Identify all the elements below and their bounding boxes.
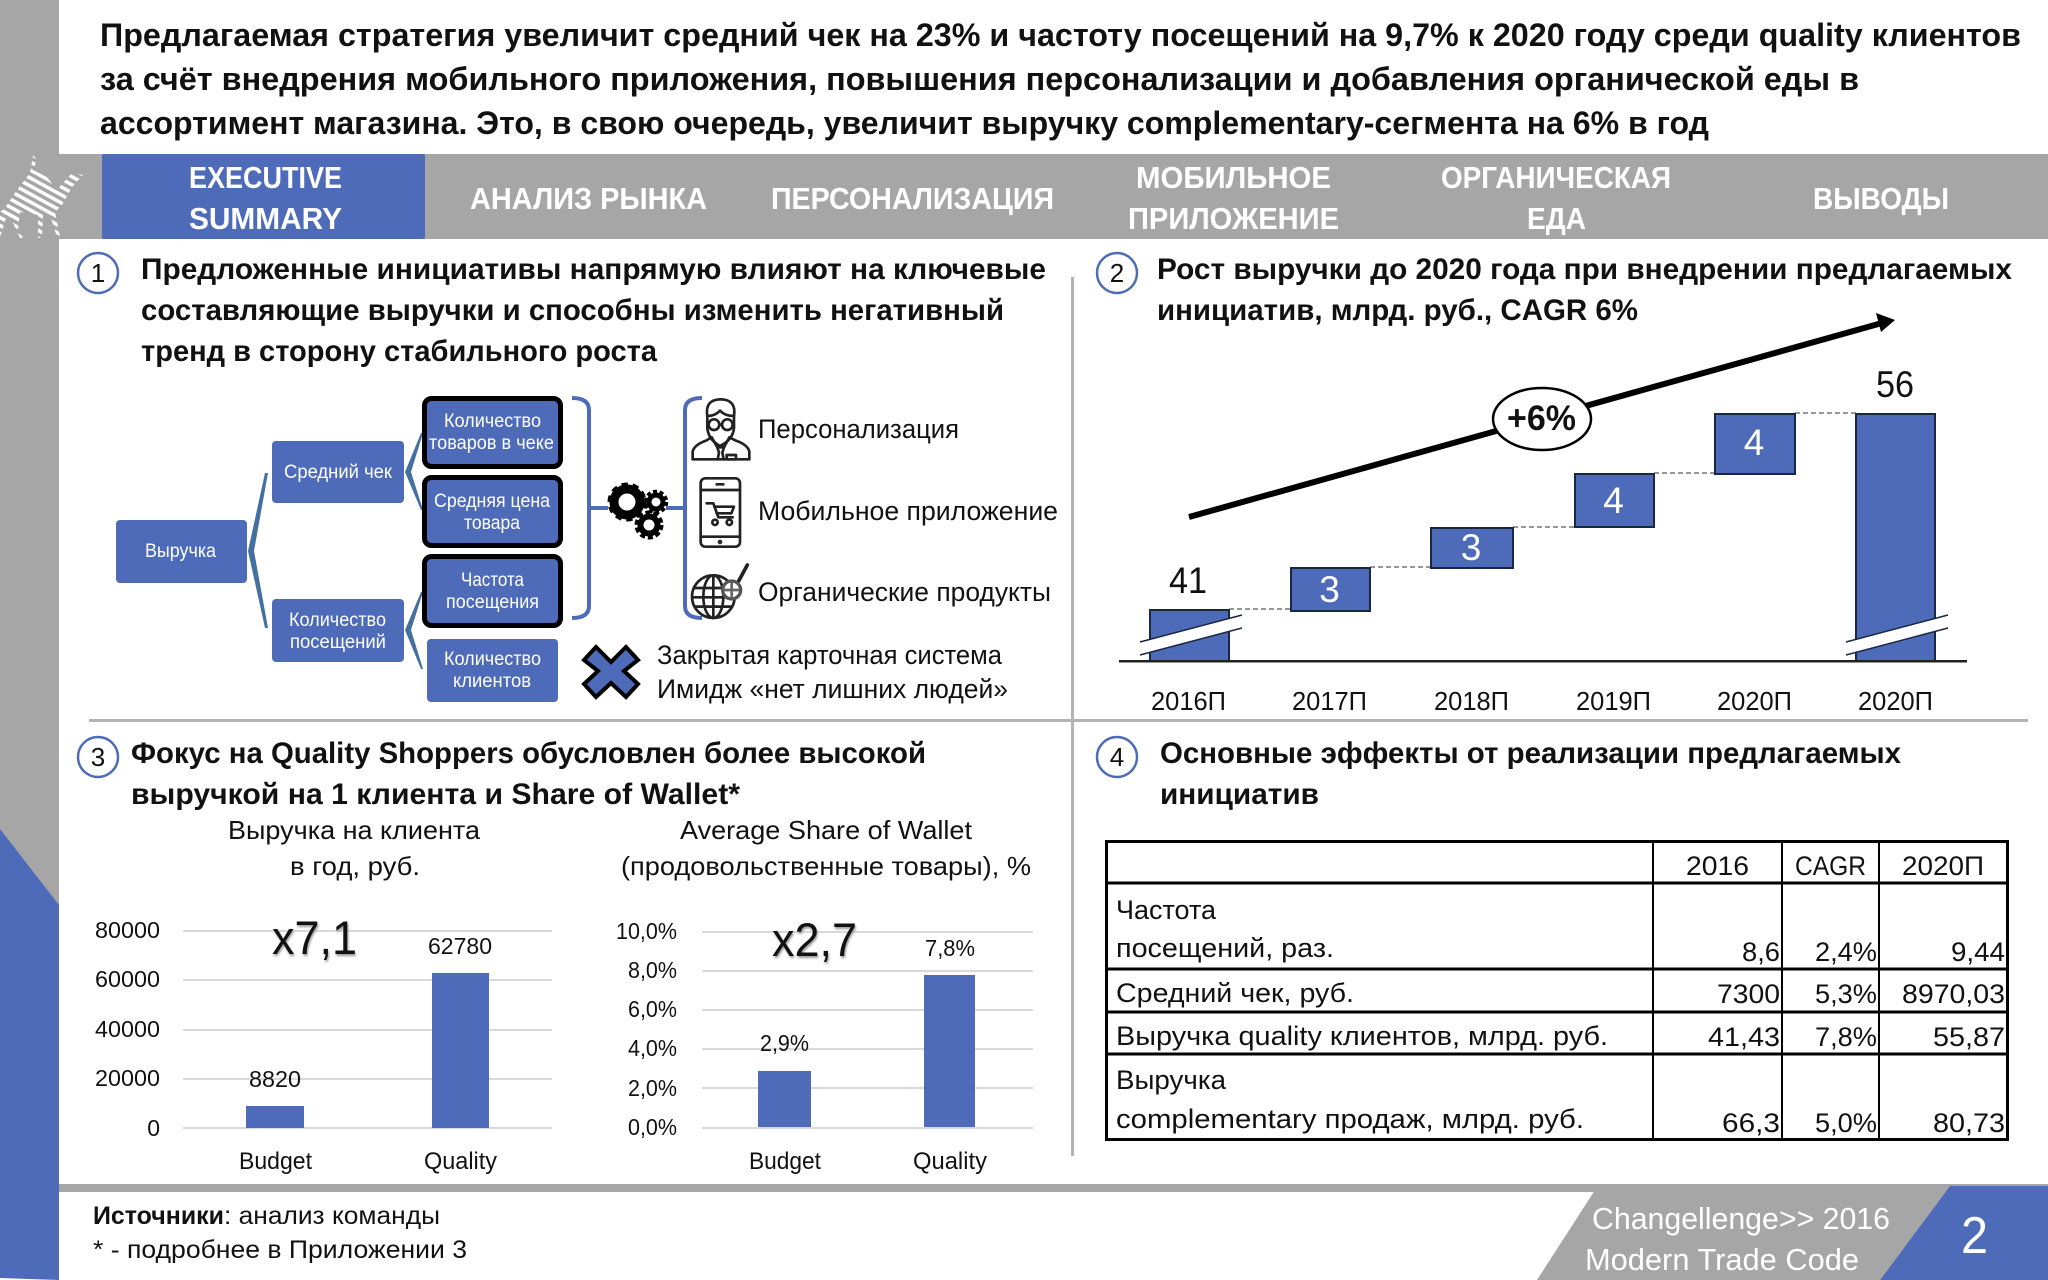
waterfall values: 41 xyxy=(1169,560,1207,601)
box: average item price: Средняя цена xyxy=(434,491,550,512)
navigation bar xyxy=(0,154,2048,239)
right bracket xyxy=(572,398,608,618)
effects table xyxy=(1106,841,2008,1140)
bar chart: share of wallet: 6,0% xyxy=(628,996,677,1022)
box: revenue xyxy=(116,520,247,583)
section number 1 xyxy=(78,253,118,293)
tab: conclusions: ВЫВОДЫ xyxy=(1813,181,1949,216)
waterfall axis xyxy=(1119,660,1967,662)
row: complementary revenue: 80,73 xyxy=(1933,1108,2005,1138)
bar chart: share of wallet: 2,0% xyxy=(628,1075,677,1101)
row: average check: 7300 xyxy=(1717,979,1780,1009)
row: visit frequency: Частота xyxy=(1116,895,1217,925)
tab: organic food: ЕДА xyxy=(1527,201,1586,236)
sources note: * - подробнее в Приложении 3 xyxy=(93,1236,467,1264)
sources note: Источники xyxy=(93,1202,224,1230)
waterfall year labels xyxy=(1151,686,1933,716)
table header: 2020П xyxy=(1902,851,1984,881)
bar chart: share of wallet: 2,9% xyxy=(760,1030,809,1056)
left sidebar xyxy=(0,0,59,1280)
table header xyxy=(1686,851,1984,881)
bar chart: revenue per client: Выручка на клиента xyxy=(228,815,481,845)
panel 1: initiatives and revenue drivers xyxy=(78,253,1058,704)
row: average check: 8970,03 xyxy=(1902,979,2005,1009)
bar chart: revenue per client xyxy=(95,815,552,1175)
waterfall values: 56 xyxy=(1876,364,1914,405)
bar chart: share of wallet: 10,0% xyxy=(616,918,677,944)
label: mobile app: Мобильное приложение xyxy=(758,496,1058,526)
waterfall year labels: 2020П xyxy=(1717,686,1792,716)
dividers xyxy=(89,277,2028,1156)
table header: 2016 xyxy=(1686,851,1749,881)
row: visit frequency: 9,44 xyxy=(1951,937,2005,967)
bar chart: share of wallet: Average Share of Wallet xyxy=(680,815,973,845)
table header: CAGR xyxy=(1795,851,1866,881)
bar chart: revenue per client: 40000 xyxy=(95,1016,160,1042)
panel 1 heading xyxy=(141,253,1046,368)
panel 4 heading xyxy=(1160,737,1901,811)
row: average check: 5,3% xyxy=(1815,979,1877,1009)
bar chart: share of wallet: x2,7 xyxy=(772,913,857,966)
box: visit frequency: посещения xyxy=(446,592,539,613)
growth arrow xyxy=(1189,313,1895,517)
bar chart: revenue per client: 80000 xyxy=(95,917,160,943)
row: complementary revenue: 66,3 xyxy=(1722,1108,1780,1138)
tab: organic food: ОРГАНИЧЕСКАЯ xyxy=(1441,160,1671,195)
bar chart: revenue per client: 0 xyxy=(147,1115,160,1141)
bar chart: share of wallet: Quality xyxy=(913,1148,987,1175)
section number 2: 2 xyxy=(1110,258,1124,288)
row: complementary revenue: complementary продаж, млрд. руб. xyxy=(1116,1104,1584,1134)
box: items per check: Количество xyxy=(444,411,541,432)
row: complementary revenue: Выручка xyxy=(1116,1065,1227,1095)
panel 1 heading: составляющие выручки и способны изменить негативный xyxy=(141,294,1004,327)
section number 1: 1 xyxy=(91,258,105,288)
waterfall year labels: 2017П xyxy=(1292,686,1367,716)
tab: market analysis: АНАЛИЗ РЫНКА xyxy=(470,181,707,216)
growth bubble +6%: +6% xyxy=(1507,399,1576,438)
event badge: Modern Trade Code xyxy=(1585,1242,1859,1277)
panel 2 heading: Рост выручки до 2020 года при внедрении предлагаемых xyxy=(1157,253,2012,286)
waterfall year labels: 2020П xyxy=(1858,686,1933,716)
panel 2: revenue growth waterfall xyxy=(1097,253,2012,716)
waterfall year labels: 2018П xyxy=(1434,686,1509,716)
box: average check xyxy=(272,441,404,503)
icon: phone with cart xyxy=(701,478,740,547)
bar chart: revenue per client: 8820 xyxy=(249,1066,301,1092)
icon: gears xyxy=(610,485,666,538)
icon: globe with magnifier xyxy=(692,565,747,618)
excluded items text: Имидж «нет лишних людей» xyxy=(657,674,1008,704)
row: quality revenue: Выручка quality клиентов, млрд. руб. xyxy=(1116,1021,1608,1051)
bar chart: revenue per client: x7,1 xyxy=(272,911,357,964)
event badge xyxy=(1537,1186,1950,1280)
tab: mobile app: МОБИЛЬНОЕ xyxy=(1136,160,1331,195)
driver tree connectors xyxy=(248,433,423,669)
row: visit frequency: посещений, раз. xyxy=(1116,933,1334,963)
panel 1 heading: Предложенные инициативы напрямую влияют на ключевые xyxy=(141,253,1046,286)
tab: personalization: ПЕРСОНАЛИЗАЦИЯ xyxy=(771,181,1054,216)
box: items per check xyxy=(424,398,560,466)
section number 3 xyxy=(78,737,118,777)
headline: ассортимент магазина. Это, в свою очередь, увеличит выручку complementary-сегмента на 6% в год xyxy=(100,105,1709,141)
box: items per check: товаров в чеке xyxy=(429,433,554,454)
headline: Предлагаемая стратегия увеличит средний чек на 23% и частоту посещений на 9,7% к 2020 году среди quality клиентов xyxy=(100,17,2021,53)
active tab: executive summary xyxy=(102,154,425,239)
sources note: : анализ команды xyxy=(224,1202,440,1230)
row: quality revenue: 55,87 xyxy=(1933,1022,2005,1052)
bar chart: share of wallet: (продовольственные товары), % xyxy=(621,851,1031,881)
tab: mobile app xyxy=(1128,160,1339,236)
panel 3 heading xyxy=(131,737,926,811)
bar chart: revenue per client: 62780 xyxy=(428,933,492,959)
waterfall values: 4 xyxy=(1744,422,1764,463)
panel 2 heading: инициатив, млрд. руб., CAGR 6% xyxy=(1157,294,1638,327)
panel 4 heading: инициатив xyxy=(1160,778,1319,811)
waterfall values xyxy=(1169,364,1914,610)
box: revenue: Выручка xyxy=(145,541,216,562)
section number 2 xyxy=(1097,253,1137,293)
section number 4: 4 xyxy=(1110,742,1124,772)
tab: mobile app: ПРИЛОЖЕНИЕ xyxy=(1128,201,1339,236)
row: average check xyxy=(1116,978,2005,1009)
bar chart: share of wallet: 0,0% xyxy=(628,1114,677,1140)
bar chart: revenue per client: 20000 xyxy=(95,1065,160,1091)
waterfall values: 3 xyxy=(1461,527,1481,568)
bar chart: revenue per client: Quality xyxy=(424,1148,497,1175)
headline xyxy=(100,17,2021,141)
waterfall bars xyxy=(1150,414,1935,661)
bar chart: share of wallet: 8,0% xyxy=(628,957,677,983)
box: average item price: товара xyxy=(464,513,520,534)
tab: organic food xyxy=(1441,160,1671,236)
box: average check: Средний чек xyxy=(284,462,393,483)
box: average item price xyxy=(424,478,560,546)
active tab: executive summary: SUMMARY xyxy=(189,201,342,236)
row: quality revenue: 41,43 xyxy=(1708,1022,1780,1052)
panel 3 heading: выручкой на 1 клиента и Share of Wallet* xyxy=(131,778,740,811)
footer xyxy=(59,1184,2048,1280)
bar chart: revenue per client: 60000 xyxy=(95,966,160,992)
sources note xyxy=(93,1202,467,1264)
left bracket xyxy=(666,398,702,618)
growth bubble +6% xyxy=(1493,388,1591,450)
event badge: Changellenge>> 2016 xyxy=(1592,1201,1890,1236)
row: visit frequency: 2,4% xyxy=(1815,937,1877,967)
row: visit frequency: 8,6 xyxy=(1742,937,1780,967)
row: complementary revenue: 5,0% xyxy=(1815,1108,1877,1138)
bar chart: revenue per client: в год, руб. xyxy=(290,851,420,881)
bar chart: share of wallet: Budget xyxy=(749,1148,821,1175)
waterfall values: 3 xyxy=(1319,569,1340,610)
icon: person with glasses xyxy=(693,399,749,459)
row: visit frequency xyxy=(1116,895,2005,967)
connector dashes xyxy=(1229,413,1856,609)
waterfall values: 4 xyxy=(1603,480,1624,521)
box: visit frequency: Частота xyxy=(461,570,524,591)
box: visit frequency xyxy=(424,556,560,626)
excluded items text xyxy=(657,640,1008,704)
label: organic products: Органические продукты xyxy=(758,577,1051,607)
waterfall year labels: 2019П xyxy=(1576,686,1651,716)
row: complementary revenue xyxy=(1116,1065,2005,1138)
panel 3: quality shoppers focus xyxy=(78,737,1033,1175)
section number 3: 3 xyxy=(91,742,105,772)
page number: 2 xyxy=(1961,1207,1988,1265)
bar chart: share of wallet: 7,8% xyxy=(925,935,975,961)
box: number of customers: Количество xyxy=(444,649,541,670)
panel 1 heading: тренд в сторону стабильного роста xyxy=(141,335,657,368)
row: quality revenue: 7,8% xyxy=(1815,1022,1877,1052)
box: number of visits: посещений xyxy=(290,632,386,653)
icon: blue cross xyxy=(584,647,638,697)
page number xyxy=(1880,1186,2048,1280)
bar chart: share of wallet xyxy=(616,815,1033,1175)
bar chart: revenue per client: Budget xyxy=(239,1148,312,1175)
label: personalization: Персонализация xyxy=(758,414,959,444)
waterfall year labels: 2016П xyxy=(1151,686,1226,716)
panel 3 heading: Фокус на Quality Shoppers обусловлен более высокой xyxy=(131,737,926,770)
axis breaks xyxy=(1140,615,1948,655)
box: number of customers xyxy=(427,639,558,702)
box: number of customers: клиентов xyxy=(453,671,531,692)
bar chart: share of wallet: 4,0% xyxy=(628,1035,677,1061)
panel 4 heading: Основные эффекты от реализации предлагаемых xyxy=(1160,737,1901,770)
box: number of visits: Количество xyxy=(289,610,386,631)
panel 2 heading xyxy=(1157,253,2012,327)
headline: за счёт внедрения мобильного приложения, повышения персонализации и добавления органической еды в xyxy=(100,61,1859,97)
section number 4 xyxy=(1097,737,1137,777)
row: quality revenue xyxy=(1116,1021,2005,1052)
row: average check: Средний чек, руб. xyxy=(1116,978,1354,1008)
active tab: executive summary: EXECUTIVE xyxy=(189,160,342,195)
excluded items text: Закрытая карточная система xyxy=(657,640,1003,670)
panel 4: main effects table xyxy=(1097,737,2008,1140)
box: number of visits xyxy=(272,599,404,662)
icon: striped camel logo xyxy=(0,155,83,238)
